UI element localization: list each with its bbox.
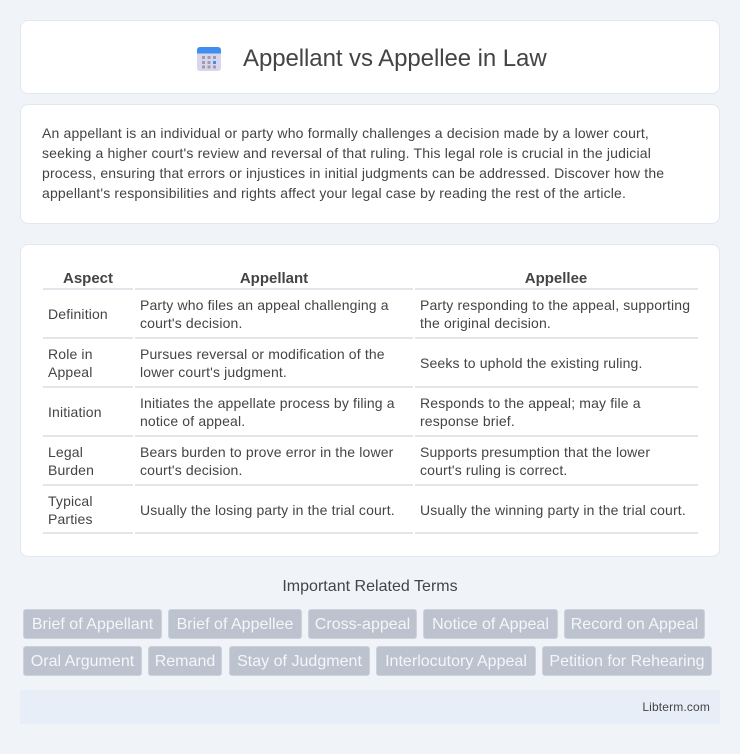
row: Initiation: response brief. [420,413,515,429]
tag: Petition for Rehearing [549,653,705,670]
tag [168,609,302,639]
panel: intro paragraph [20,104,720,224]
tag: Oral Argument [31,653,134,670]
row: Typical Parties: Parties [48,511,93,527]
intro text: An appellant is an individual or party who formally challenges a decision made by a lower court, [42,125,649,141]
intro text: appellant's responsibilities and rights affect your legal case by reading the rest of the article. [42,185,626,201]
tag [564,609,705,639]
row: Typical Parties: Usually the winning party in the trial court. [420,502,686,518]
row: Role in Appeal: Role in [48,346,93,362]
tag: Notice of Appeal [432,616,549,633]
row: Role in Appeal [43,346,698,388]
row: Legal Burden: court's decision. [140,462,242,478]
intro text: seeking a higher court's review and reversal of that ruling. This legal role is crucial in the judicial [42,145,651,161]
row: Definition: Definition [48,306,108,322]
row: Definition: Party responding to the appeal, supporting [420,297,690,313]
table header: Aspect [63,270,113,286]
row: Definition: Party who files an appeal challenging a [140,297,389,313]
title: Appellant vs Appellee in Law [243,45,547,72]
row: Initiation: Initiation [48,404,102,420]
header panel [20,20,720,94]
row: Typical Parties [43,493,698,534]
related terms heading: Important Related Terms [282,578,458,595]
tag: Remand [155,653,215,670]
row: Definition [43,297,698,339]
tag [376,646,536,676]
row: Role in Appeal: Seeks to uphold the existing ruling. [420,355,643,371]
row: Initiation: notice of appeal. [140,413,245,429]
row: Legal Burden [43,444,698,486]
tag [542,646,712,676]
tag: Stay of Judgment [237,653,362,670]
comparison table [43,270,698,534]
tag [23,609,162,639]
row: Legal Burden: Legal [48,444,83,460]
row: Role in Appeal: Pursues reversal or modification of the [140,346,385,362]
tag: Cross-appeal [315,616,410,633]
row: Initiation: Responds to the appeal; may file a [420,395,641,411]
table header: Appellee [525,270,587,286]
row: Legal Burden: Bears burden to prove error in the lower [140,444,393,460]
row: Typical Parties: Typical [48,493,93,509]
source credit: Libterm.com [642,700,710,714]
row: Legal Burden: Burden [48,462,94,478]
row: Role in Appeal: Appeal [48,364,92,380]
row: Typical Parties: Usually the losing party in the trial court. [140,502,395,518]
related terms tags [23,609,712,676]
tag: Interlocutory Appeal [385,653,527,670]
tag [423,609,558,639]
row: Legal Burden: Supports presumption that the lower [420,444,650,460]
intro text [42,125,664,201]
table header: Appellant [240,270,308,286]
tag [229,646,370,676]
tag [308,609,417,639]
tag: Brief of Appellee [177,616,293,633]
row: Initiation [43,395,698,437]
footer bar [20,690,720,724]
row: Definition: the original decision. [420,315,551,331]
table header [43,270,698,290]
tag: Brief of Appellant [32,616,153,633]
row: Role in Appeal: lower court's judgment. [140,364,287,380]
tag [23,646,142,676]
tag: Record on Appeal [571,616,698,633]
row: Initiation: Initiates the appellate process by filing a [140,395,395,411]
panel: comparison table [20,244,720,557]
tag [148,646,222,676]
intro text: process, ensuring that errors or injustices in initial judgments can be addressed. Discover how the [42,165,664,181]
icon: calendar [197,47,221,71]
row: Legal Burden: court's ruling is correct. [420,462,567,478]
row: Definition: court's decision. [140,315,242,331]
